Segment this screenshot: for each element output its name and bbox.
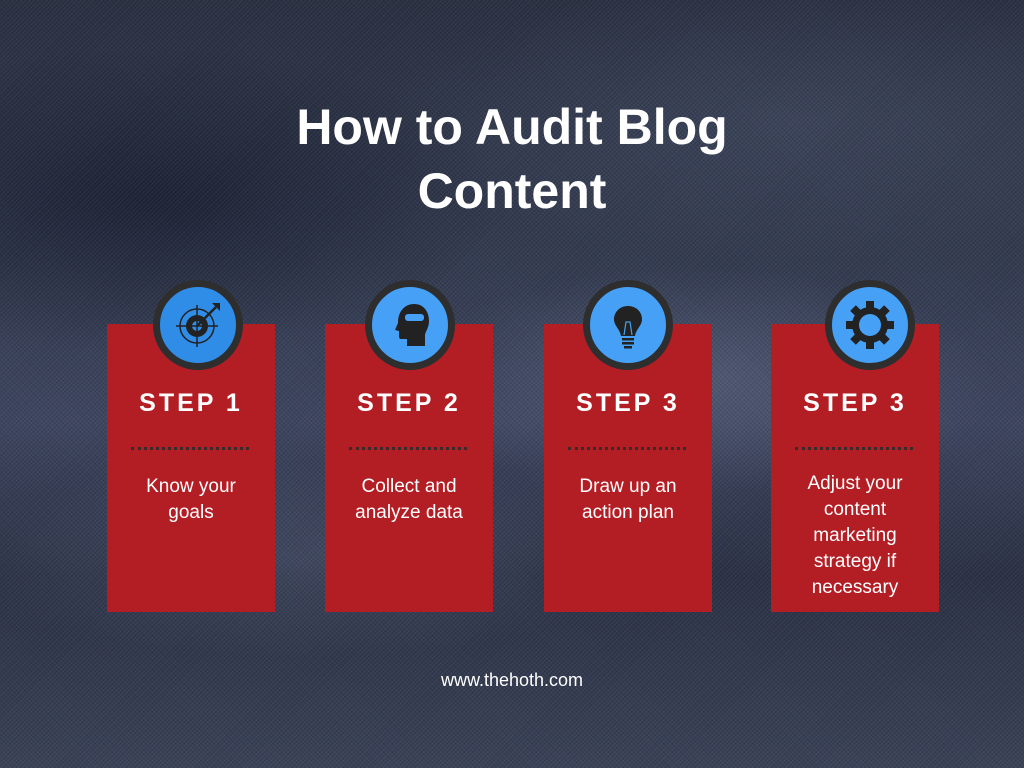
card: step 1 (107, 324, 275, 612)
step 2 label: STEP 2 (357, 389, 461, 417)
title: How to Audit Blog (296, 99, 728, 155)
icon: gear (825, 280, 915, 370)
card: step 3 (544, 324, 712, 612)
step 4 label: STEP 3 (803, 389, 907, 417)
step 3 label: STEP 3 (576, 389, 680, 417)
step 1 label: STEP 1 (139, 389, 243, 417)
step 2 text: Collect and analyze data (355, 476, 463, 523)
icon: target (153, 280, 243, 370)
card: step 4 (771, 324, 939, 612)
step 1 text: Know your goals (146, 476, 236, 523)
footer url: www.thehoth.com (441, 670, 583, 690)
card: step 2 (325, 324, 493, 612)
icon: head (365, 280, 455, 370)
step 3 text: Draw up an action plan (579, 476, 677, 523)
title (296, 99, 728, 219)
title: Content (418, 163, 606, 219)
step 4 text: Adjust your content marketing strategy if necessary (807, 473, 903, 598)
icon: light bulb (583, 280, 673, 370)
